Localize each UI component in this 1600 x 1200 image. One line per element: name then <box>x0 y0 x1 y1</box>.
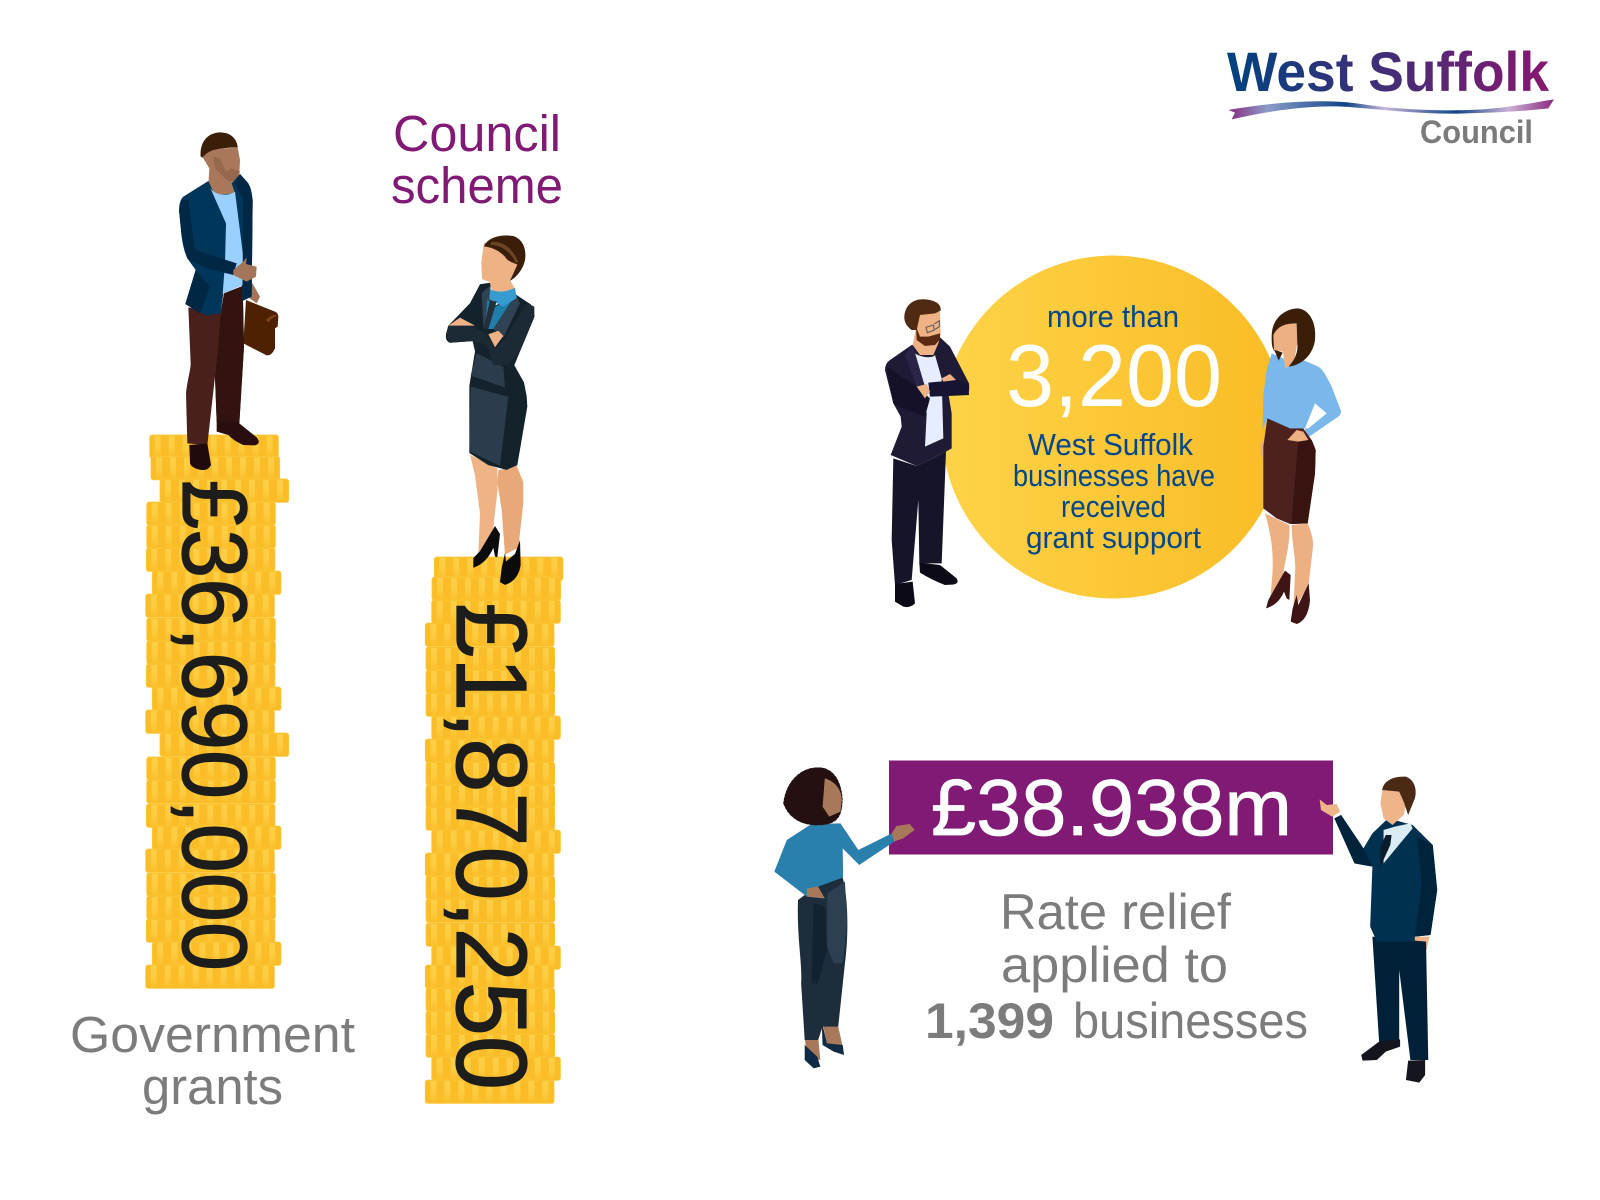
amount: council scheme: £1,870,250 <box>435 603 547 1090</box>
businesses have: businesses have <box>1013 458 1215 493</box>
label: Government grants: Government <box>70 1006 355 1063</box>
figure: man with briefcase on coins <box>179 132 278 470</box>
text: rate relief: Rate relief <box>1000 884 1231 940</box>
banner: rate relief amount: £38.938m <box>931 763 1292 852</box>
text: rate relief: businesses <box>1073 993 1308 1049</box>
more than: more than <box>1047 299 1179 334</box>
label: Government grants: grants <box>142 1058 283 1115</box>
number: 3,200: 3,200 <box>1006 326 1222 425</box>
text: rate relief: 1,399 <box>925 993 1054 1049</box>
figure: woman with folded arms on coins <box>446 235 534 585</box>
text: rate relief: applied to <box>1001 937 1228 993</box>
figure: man in navy suit pointing at banner <box>1320 777 1437 1083</box>
figure: woman pointing at banner <box>774 768 915 1068</box>
heading: Council scheme <box>391 105 563 214</box>
text: rate relief <box>925 884 1308 1049</box>
figure: woman in blue blouse beside circle <box>1261 308 1341 624</box>
West Suffolk: West Suffolk <box>1028 427 1193 462</box>
label: Government grants <box>70 1006 355 1115</box>
heading: Council scheme: Council <box>393 105 561 162</box>
coin stack: council scheme <box>425 557 563 1103</box>
grant support: grant support <box>1026 520 1201 555</box>
circle background <box>942 256 1284 598</box>
stat circle with text <box>942 256 1284 598</box>
received: received <box>1061 489 1166 524</box>
logo: West Suffolk Council: West Suffolk <box>1227 40 1550 103</box>
logo: West Suffolk Council <box>1227 40 1554 150</box>
heading: Council scheme: scheme <box>391 157 563 214</box>
amount: government grants: £36,690,000 <box>163 480 265 971</box>
figure: bearded man beside circle <box>885 299 969 607</box>
coin stack: government grants <box>146 435 289 988</box>
logo: West Suffolk Council: Council <box>1420 114 1533 150</box>
